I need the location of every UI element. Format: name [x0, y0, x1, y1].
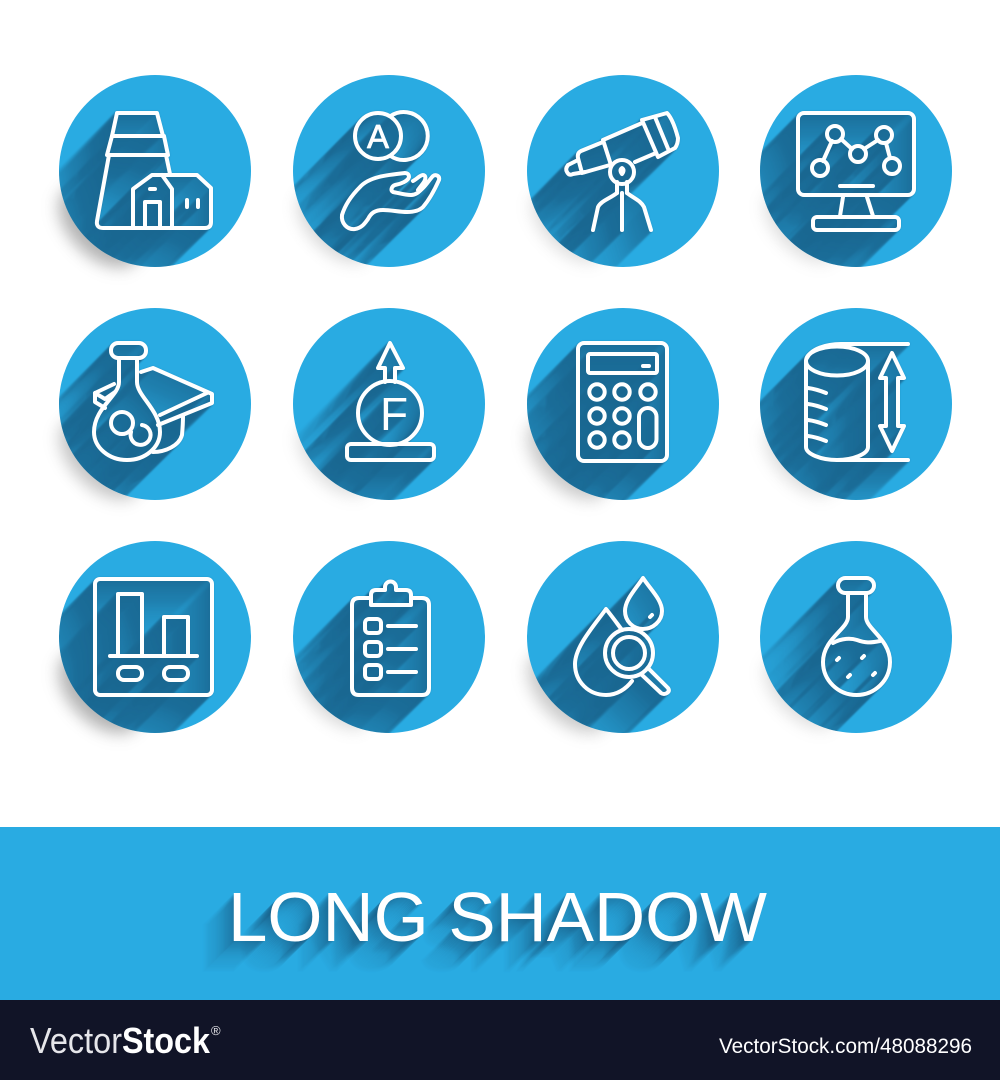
heading: long shadow: LONG SHADOW [228, 878, 767, 956]
icon: round flask with liquid [752, 541, 952, 741]
icon: telescope [519, 75, 719, 275]
icon: cylinder with height arrow [752, 308, 952, 508]
icon: monitor with line chart [752, 75, 952, 275]
banner [0, 827, 1000, 1000]
icon: clipboard checklist [285, 541, 485, 741]
icon: hand with coins: A [367, 118, 389, 155]
footer logo: ® [211, 1023, 221, 1038]
footer logo: VectorStock [30, 1020, 220, 1061]
icon: flask and graduation cap [45, 308, 251, 514]
icon: bar chart panel [43, 541, 251, 749]
icon: hand with coins [285, 75, 485, 275]
icon: cooling tower plant [43, 75, 251, 283]
footer bar [0, 1000, 1000, 1080]
icon: water drops with magnifier [513, 541, 719, 747]
icon: force F with arrow: F [380, 388, 408, 440]
icon: force F with arrow [285, 308, 485, 508]
footer image id: VectorStock.com/48088296 [719, 1035, 972, 1058]
icon: calculator [513, 308, 719, 514]
